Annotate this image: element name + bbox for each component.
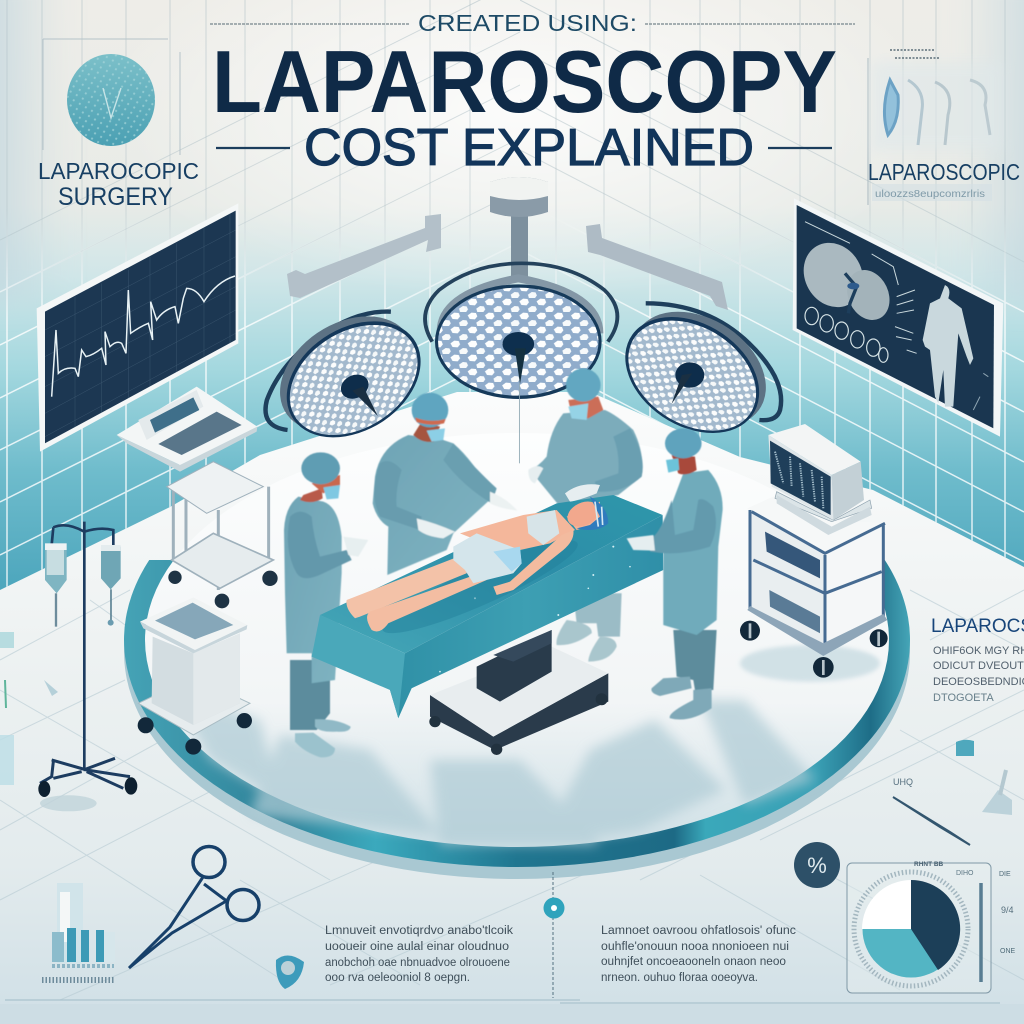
text block right — [601, 925, 796, 984]
text block right: Lamnoet oavroou ohfatlosois' ofunc — [601, 925, 796, 937]
wall background — [0, 0, 1024, 590]
small fragments right — [893, 740, 1012, 845]
IV bags — [45, 543, 121, 627]
right surgical light — [602, 288, 789, 457]
right cart with monitor — [740, 424, 888, 682]
text block right: ouhnjfet oncoeaooneln onaon neoo — [601, 956, 786, 968]
pie chart panel: ONE — [1000, 948, 1016, 955]
eyebrow: CREATED USING: — [418, 10, 637, 36]
IV stand — [38, 522, 137, 811]
text block left: Lmnuveit envotiqrdvo anabo'tlcoik — [325, 925, 513, 937]
left surgical light — [257, 293, 444, 461]
text block right: nrneon. ouhuo floraa ooeoyva. — [601, 972, 758, 984]
center surgical light — [425, 263, 617, 463]
panel: laparoscopic surgery: SURGERY — [58, 183, 173, 211]
percent badge — [794, 842, 840, 888]
side note: DTOGOETA — [933, 692, 994, 704]
surgical team and table — [284, 368, 723, 757]
wall fragments left — [0, 632, 58, 785]
panel: laparoscopic illustration — [868, 50, 1020, 205]
table drape — [312, 495, 663, 718]
scan rings — [805, 307, 888, 362]
ECG trace — [52, 276, 235, 397]
pie — [862, 880, 960, 978]
stacked device — [138, 597, 252, 755]
text block left: anobchoh oae nbnuadvoe olrouoene — [325, 957, 510, 969]
platform ring — [124, 560, 910, 879]
pie chart panel: DIE — [999, 871, 1011, 878]
pie chart panel: DIHO — [956, 870, 974, 877]
timeline marker — [544, 872, 564, 998]
scan image — [792, 232, 897, 327]
keyboard console — [117, 387, 257, 472]
floor — [0, 392, 1024, 1024]
table base — [429, 630, 608, 755]
text block left: uooueir oine aulal einar oloudnuo — [325, 941, 509, 953]
text block left: ooo rva oeleooniol 8 oepgn. — [325, 972, 470, 984]
surgeon: back left — [373, 393, 517, 575]
title block — [210, 10, 855, 177]
panel: laparoscopic surgery: LAPAROCOPIC — [38, 158, 199, 184]
left monitor — [37, 203, 238, 452]
panel: laparoscopic illustration: uloozzs8eupcomzrlris — [875, 189, 985, 200]
surgeon hand on patient — [565, 484, 600, 502]
surgeon: back right — [528, 368, 643, 662]
pie chart panel: RHNT BB — [914, 861, 944, 868]
text block right: ouhfle'onouun nooa nnonioeen nui — [601, 941, 789, 953]
left cart — [167, 462, 278, 608]
monitor unit — [768, 424, 872, 535]
pie chart panel: 9/4 — [1001, 905, 1014, 915]
patient — [346, 484, 608, 647]
surgeon: front right — [627, 428, 723, 720]
surgeon: front left — [284, 452, 368, 757]
right monitor — [792, 198, 1003, 437]
icon: small badge — [276, 955, 304, 989]
text block left — [325, 925, 513, 984]
percent badge: % — [807, 853, 827, 878]
icon: forceps — [129, 846, 259, 968]
scalpel — [893, 797, 970, 845]
floor shadows — [170, 690, 815, 845]
side note — [931, 616, 1024, 704]
anatomy sketch — [884, 80, 990, 145]
ceiling mount and light arms — [287, 177, 728, 310]
pie chart panel — [847, 861, 1016, 993]
main title: LAPAROSCOPY — [212, 32, 837, 131]
small fragments right: UHQ — [893, 777, 913, 787]
mini bar chart — [42, 883, 115, 980]
subtitle: COST EXPLAINED — [304, 119, 754, 177]
panel: laparoscopic surgery — [38, 39, 199, 211]
body figure — [923, 285, 973, 407]
